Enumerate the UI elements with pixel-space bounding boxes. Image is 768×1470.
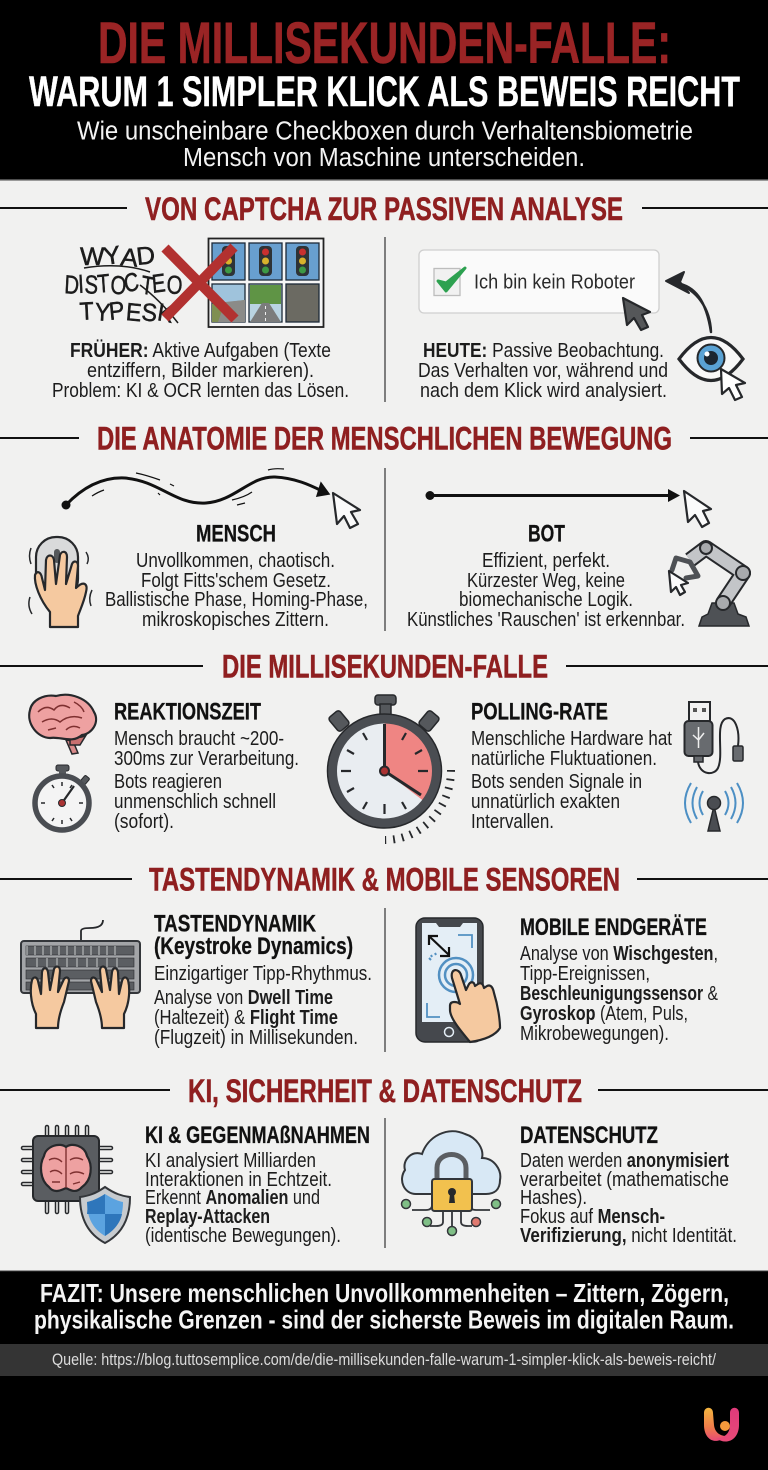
text: mobile endgeräte: Mikrobewegungen). [520,1023,669,1045]
icon: distorted captcha text: DISTOCTEO [64,266,184,301]
text: mensch: Ballistische Phase, Homing-Phase, [105,589,368,611]
section 5: ki, sicherheit & datenschutz [0,1073,768,1248]
text: heute: Das Verhalten vor, während und [418,360,668,382]
text: datenschutz: verarbeitet (mathematische [520,1169,729,1191]
text: tastendynamik: (Flugzeit) in Millisekunden. [154,1027,358,1049]
text: bot [407,520,685,631]
source bar [0,1344,768,1376]
icon: brain [29,695,96,754]
subtitle [77,118,693,172]
icon: distorted captcha text [64,241,184,329]
text: datenschutz: Hashes). [520,1187,587,1209]
text: polling-rate: POLLING-RATE [471,698,608,726]
text: tastendynamik: (Keystroke Dynamics) [154,933,353,960]
logo [704,1408,739,1442]
text: reaktionszeit: 300ms zur Verarbeitung. [114,748,299,770]
text: ki & gegenmassnahmen: Replay-Attacken [145,1206,270,1228]
text: reaktionszeit: REAKTIONSZEIT [114,698,261,726]
icon: red x [165,247,235,319]
icon: checkbox widget: Ich bin kein Roboter [474,272,635,294]
icon: phone with hand [416,918,500,1042]
heading: millisekunden-falle: DIE MILLISEKUNDEN-FALLE [222,648,548,684]
text: reaktionszeit: (sofort). [114,811,174,833]
section 4: tastendynamik & mobile sensoren [0,862,768,1052]
text: früher: Problem: KI & OCR lernten das Lösen. [52,380,349,402]
text: mobile endgeräte: Gyroskop (Atem, Puls, [520,1003,688,1025]
text: polling-rate: natürliche Fluktuationen. [471,748,657,770]
icon: cloud with padlock [402,1131,500,1236]
text: ki & gegenmassnahmen: Interaktionen in Echtzeit. [145,1169,332,1191]
text: tastendynamik: (Haltezeit) & Flight Time [154,1007,338,1029]
icon: distorted captcha text: WYAD [80,241,157,273]
section 1: von captcha zur passiven analyse [0,191,768,402]
text: reaktionszeit: Bots reagieren [114,771,222,793]
heading: ki sicherheit: KI, SICHERHEIT & DATENSCHUTZ [188,1073,582,1109]
icon: usb plug [684,702,743,773]
text: ki & gegenmassnahmen [145,1122,370,1247]
text: früher: entziffern, Bilder markieren). [87,360,314,382]
heading: von captcha: VON CAPTCHA ZUR PASSIVEN ANALYSE [145,191,623,227]
icon: human path with cursor [62,469,360,528]
icon: grey cursor [623,298,650,330]
text: datenschutz: DATENSCHUTZ [520,1122,658,1149]
text: ki & gegenmassnahmen: KI & GEGENMAßNAHMEN [145,1122,370,1149]
icon: big stopwatch [328,695,451,840]
text: datenschutz: Fokus auf Mensch- [520,1206,665,1228]
text: reaktionszeit: Mensch braucht ~200- [114,728,284,750]
icon: bot path with cursor [426,489,711,527]
text: polling-rate: Menschliche Hardware hat [471,728,672,750]
conclusion [34,1278,734,1334]
text: polling-rate: unnatürlich exakten [471,791,620,813]
text: ki & gegenmassnahmen: Erkennt Anomalien und [145,1187,320,1209]
subtitle: Wie unscheinbare Checkboxen durch Verhaltensbiometrie [77,118,693,146]
icon: ai chip with brain [23,1127,111,1212]
icon: small stopwatch [35,765,90,830]
text: polling-rate: Intervallen. [471,811,554,833]
header title [29,11,740,116]
text: tastendynamik: Einzigartiger Tipp-Rhythmus. [154,963,372,985]
text: früher [52,339,349,402]
icon: eye with cursor [679,338,745,400]
text: ki & gegenmassnahmen: (identische Bewegungen). [145,1225,341,1247]
text: mensch: MENSCH [196,520,276,548]
text: bot: Effizient, perfekt. [482,550,610,572]
subtitle: Mensch von Maschine unterscheiden. [183,144,585,172]
text: mensch: Folgt Fitts'schem Gesetz. [141,570,331,592]
text: heute [418,340,668,402]
heading: tastendynamik: TASTENDYNAMIK & MOBILE SENSOREN [149,862,620,898]
text: mobile endgeräte: Analyse von Wischgesten, [520,943,718,965]
text: tastendynamik: Analyse von Dwell Time [154,987,333,1009]
icon: checkbox widget [419,250,659,313]
text: reaktionszeit [114,698,299,833]
text: ki & gegenmassnahmen: KI analysiert Milliarden [145,1150,316,1172]
text: reaktionszeit: unmenschlich schnell [114,791,276,813]
text: datenschutz: Daten werden anonymisiert [520,1150,729,1172]
section 2: anatomie der bewegung [0,420,768,631]
text: tastendynamik [154,910,372,1049]
icon: image captcha grid [208,238,324,327]
text: mobile endgeräte: MOBILE ENDGERÄTE [520,914,707,941]
text: bot: Künstliches 'Rauschen' ist erkennbar. [407,609,685,631]
icon: hand on mouse [29,537,92,627]
icon: distorted captcha text: TYPESK [79,296,176,329]
text: bot: Kürzester Weg, keine [467,570,625,592]
icon: keyboard with hands [21,920,140,1028]
text: bot: biomechanische Logik. [459,589,633,611]
section 3: die millisekunden-falle [0,648,768,840]
text: datenschutz [520,1122,737,1247]
icon: curved arrow [666,272,711,332]
text: bot: BOT [528,520,565,548]
text: polling-rate [471,698,672,833]
text: mobile endgeräte: Tipp-Ereignissen, [520,963,650,985]
text: tastendynamik: TASTENDYNAMIK [154,910,317,938]
text: mensch: Unvollkommen, chaotisch. [136,550,335,572]
icon: security shield [80,1187,130,1243]
text: früher: FRÜHER: Aktive Aufgaben (Texte [70,339,331,362]
text: mensch: mikroskopisches Zittern. [142,609,329,631]
text: heute: HEUTE: Passive Beobachtung. [423,340,664,362]
text: polling-rate: Bots senden Signale in [471,771,642,793]
icon: signal tower [685,783,743,831]
text: mobile endgeräte: Beschleunigungssensor & [520,983,719,1005]
text: mensch [105,520,368,631]
text: heute: nach dem Klick wird analysiert. [420,380,667,402]
text: datenschutz: Verifizierung, nicht Identität. [520,1225,737,1247]
icon: robot arm [669,542,750,626]
text: mobile endgeräte [520,914,719,1045]
